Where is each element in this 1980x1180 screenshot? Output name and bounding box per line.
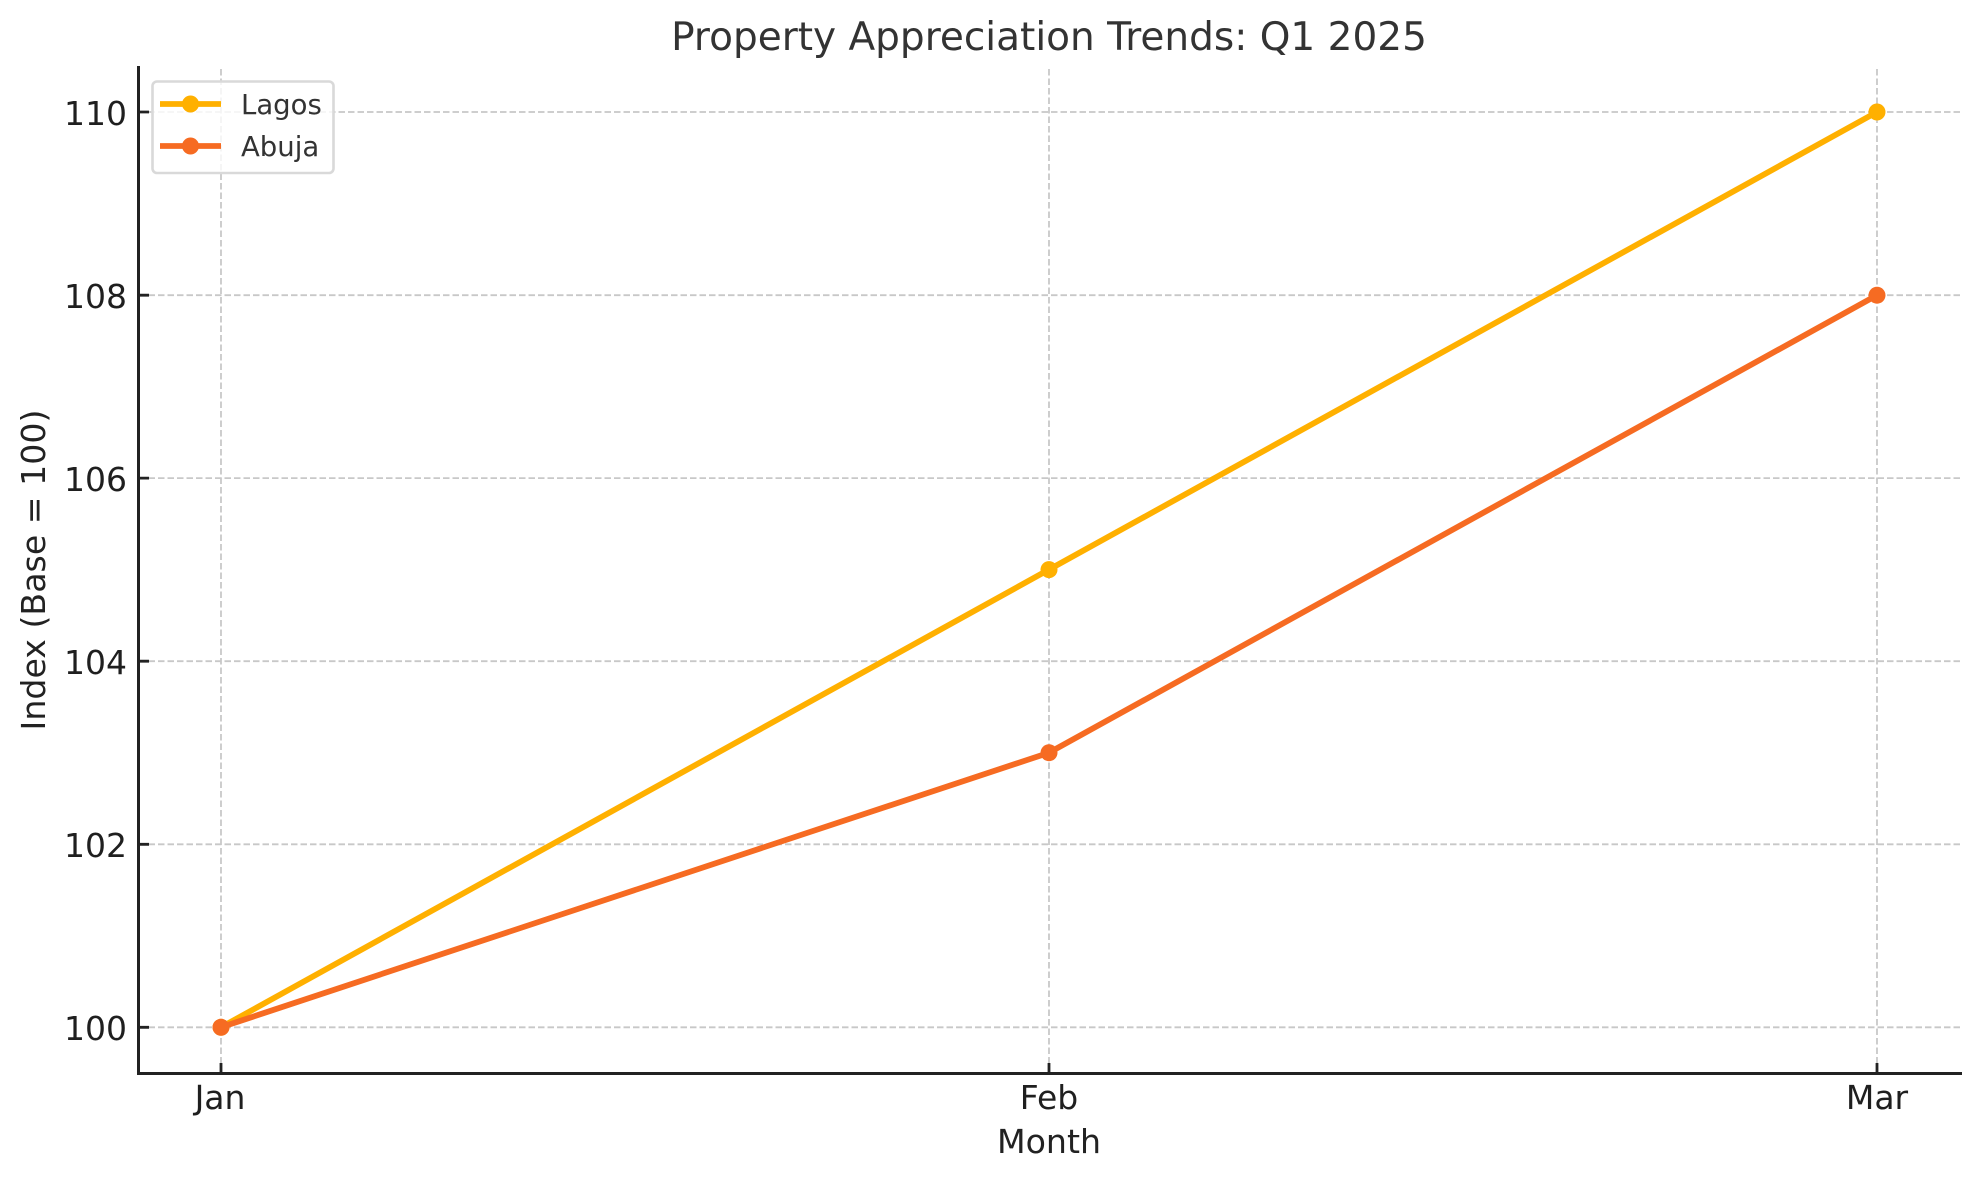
legend entry: Lagos: Lagos (241, 89, 322, 121)
y axis title: Index (Base = 100) (14, 410, 53, 730)
x axis tick labels: Jan (193, 1078, 245, 1117)
y axis tick labels (64, 94, 127, 1048)
y axis tick labels: 106 (64, 460, 127, 499)
x axis title: Month (997, 1122, 1101, 1161)
x axis tick labels: Mar (1846, 1078, 1909, 1117)
series: Abuja (212, 287, 1886, 1036)
y axis tick labels: 108 (64, 277, 127, 316)
x axis tick labels: Feb (1020, 1078, 1078, 1117)
legend entry: Lagos (160, 89, 322, 121)
y axis tick labels: 100 (64, 1009, 127, 1048)
series: Lagos (212, 104, 1886, 1036)
legend entry: Abuja: Abuja (241, 131, 319, 163)
legend (152, 82, 334, 173)
title: Property Appreciation Trends: Q1 2025 (671, 15, 1427, 60)
y axis tick labels: 110 (64, 94, 127, 133)
y axis tick labels: 104 (64, 643, 127, 682)
y axis (138, 66, 1962, 1074)
y axis tick labels: 102 (64, 826, 127, 865)
legend entry: Abuja (160, 131, 319, 163)
x axis tick labels (193, 1078, 1909, 1117)
